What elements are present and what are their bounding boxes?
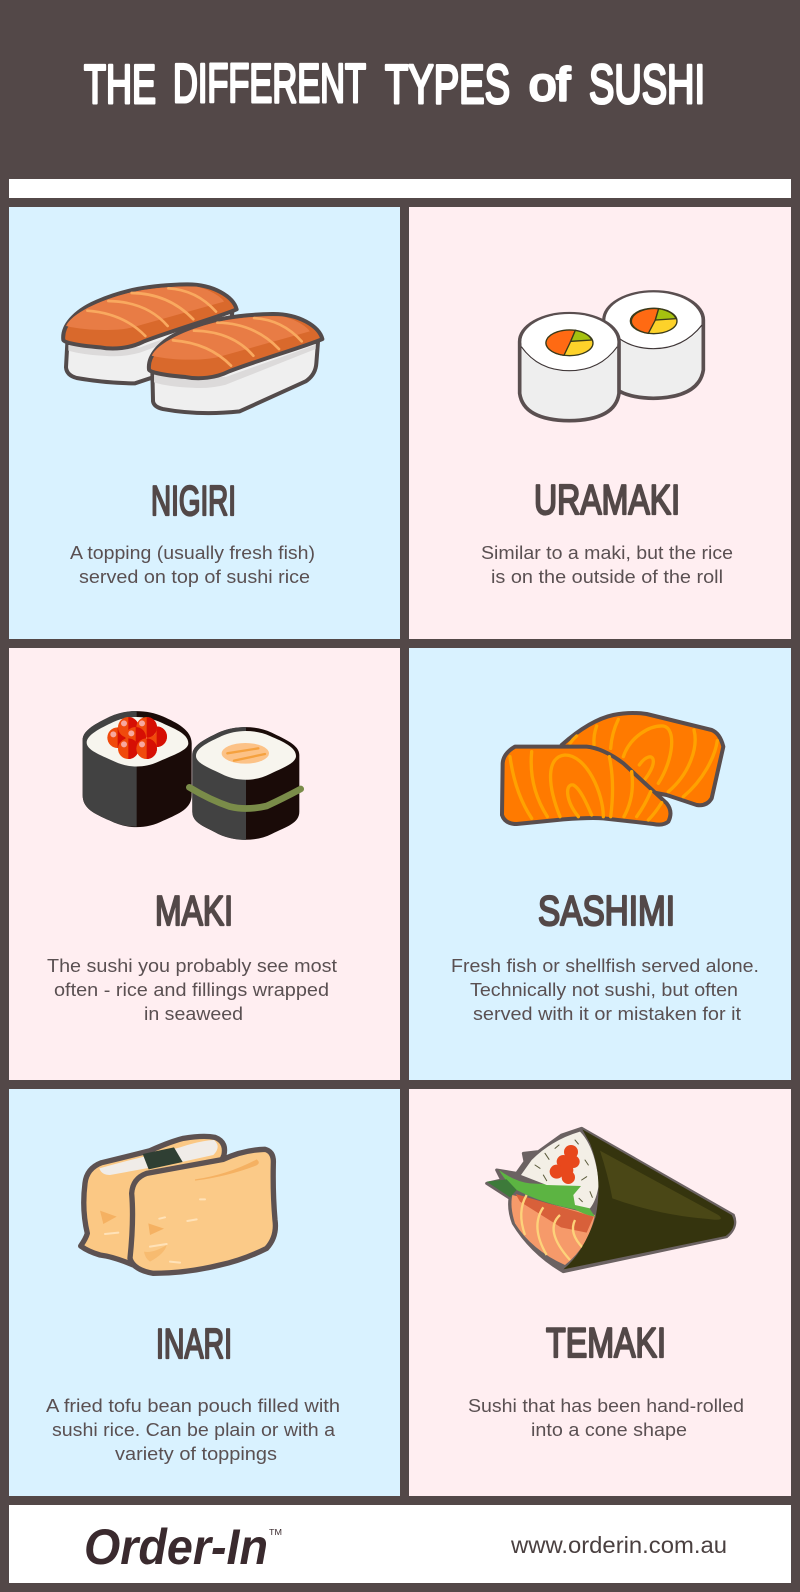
icon: nigiri front piece bbox=[149, 314, 322, 413]
roe bbox=[550, 1145, 580, 1184]
panel: sashimi bbox=[409, 648, 791, 1080]
description: sashimi: Fresh fish or shellfish served alone. bbox=[451, 955, 759, 976]
description: temaki: into a cone shape bbox=[531, 1419, 687, 1440]
right roll bbox=[192, 727, 299, 840]
description: nigiri bbox=[70, 542, 315, 587]
title: SUSHI bbox=[589, 53, 705, 115]
nori highlight bbox=[600, 1151, 721, 1220]
panel: inari bbox=[9, 1089, 400, 1496]
description: maki: The sushi you probably see most bbox=[47, 955, 337, 976]
icon: maki rolls bbox=[83, 711, 301, 840]
nori bbox=[563, 1129, 734, 1269]
description: inari bbox=[46, 1395, 340, 1464]
description: uramaki: is on the outside of the roll bbox=[491, 566, 723, 587]
back pouch bbox=[81, 1136, 224, 1265]
front roll bbox=[520, 314, 619, 421]
description: uramaki bbox=[481, 542, 733, 587]
left roll bbox=[83, 711, 192, 827]
description: sashimi: served with it or mistaken for it bbox=[473, 1003, 741, 1024]
heading: inari: INARI bbox=[156, 1320, 232, 1367]
trademark: TM bbox=[269, 1528, 282, 1537]
heading: nigiri: NIGIRI bbox=[151, 477, 236, 524]
icon: nigiri bbox=[63, 284, 237, 383]
panel: temaki bbox=[409, 1089, 791, 1496]
front pouch bbox=[130, 1149, 275, 1273]
icon: sashimi slices bbox=[502, 713, 723, 825]
panel: uramaki bbox=[409, 207, 791, 639]
website url: www.orderin.com.au bbox=[510, 1532, 727, 1558]
footer bbox=[9, 1505, 791, 1583]
description: inari: variety of toppings bbox=[115, 1443, 277, 1464]
lettuce bbox=[499, 1170, 595, 1217]
description: sashimi bbox=[451, 955, 759, 1024]
logo: Order-In: Order-In bbox=[84, 1519, 268, 1575]
description: inari: sushi rice. Can be plain or with a bbox=[52, 1419, 336, 1440]
title bbox=[84, 52, 705, 115]
salmon bbox=[511, 1195, 595, 1265]
green band bbox=[189, 787, 301, 809]
heading: maki: MAKI bbox=[155, 887, 233, 934]
outline bbox=[487, 1128, 735, 1272]
description: maki bbox=[47, 955, 337, 1024]
description: maki: often - rice and fillings wrapped bbox=[54, 979, 329, 1000]
title: of bbox=[529, 58, 570, 110]
icon: inari pouch bbox=[81, 1136, 275, 1273]
description: temaki bbox=[468, 1395, 744, 1440]
title: TYPES bbox=[385, 53, 510, 115]
description: nigiri: A topping (usually fresh fish) bbox=[70, 542, 315, 563]
description: nigiri: served on top of sushi rice bbox=[79, 566, 310, 587]
panel: nigiri bbox=[9, 207, 400, 639]
rice flecks bbox=[535, 1140, 592, 1202]
panel: maki bbox=[9, 648, 400, 1080]
white banner strip bbox=[9, 179, 791, 198]
pouch highlights bbox=[100, 1159, 259, 1263]
front slice bbox=[502, 747, 670, 825]
description: inari: A fried tofu bean pouch filled with bbox=[46, 1395, 340, 1416]
description: sashimi: Technically not sushi, but often bbox=[470, 979, 738, 1000]
heading: temaki: TEMAKI bbox=[546, 1319, 666, 1366]
icon: uramaki rolls bbox=[520, 292, 703, 421]
description: temaki: Sushi that has been hand-rolled bbox=[468, 1395, 744, 1416]
nori strip bbox=[143, 1147, 183, 1169]
icon: temaki cone bbox=[487, 1128, 735, 1272]
back roll bbox=[604, 292, 703, 398]
rice bbox=[521, 1132, 599, 1208]
description: uramaki: Similar to a maki, but the rice bbox=[481, 542, 733, 563]
title: DIFFERENT bbox=[173, 52, 366, 114]
back slice bbox=[562, 713, 723, 805]
rice bbox=[99, 1140, 218, 1175]
description: maki: in seaweed bbox=[144, 1003, 243, 1024]
heading: uramaki: URAMAKI bbox=[534, 476, 680, 523]
title: THE bbox=[84, 53, 156, 115]
salmon dark band bbox=[516, 1194, 594, 1233]
heading: sashimi: SASHIMI bbox=[538, 887, 675, 934]
